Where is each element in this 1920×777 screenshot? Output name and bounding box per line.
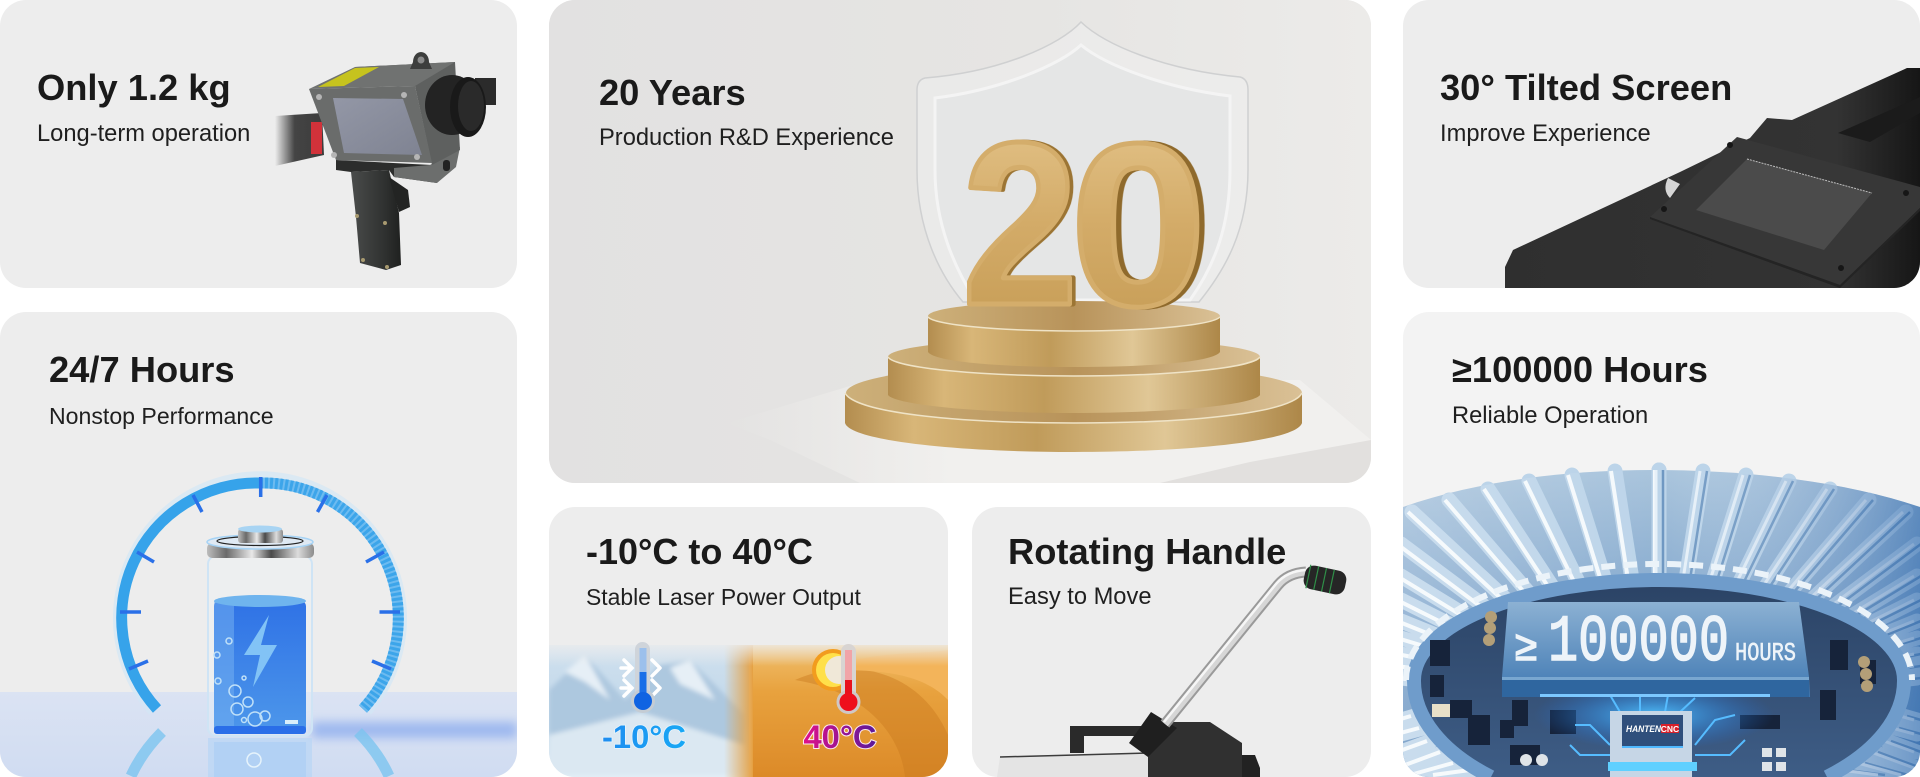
big golden number	[962, 94, 1207, 354]
text: subtitle: Nonstop Performance	[49, 403, 274, 429]
circuit board	[1406, 564, 1912, 777]
panel: rotating handle	[972, 507, 1371, 777]
panel: only 1.2 kg	[0, 0, 517, 288]
heading: Rotating Handle	[1008, 531, 1286, 572]
logo chip	[1608, 711, 1697, 777]
machine body	[997, 712, 1260, 777]
icon: snowflake	[621, 660, 660, 696]
handle tube	[1164, 570, 1306, 724]
heading: Only 1.2 kg	[37, 67, 231, 108]
handle grip	[1302, 564, 1348, 596]
text: subtitle: Production R&D Experience	[599, 125, 894, 151]
heading: -10°C to 40°C	[586, 531, 813, 572]
panel: 24/7 hours	[0, 312, 517, 777]
logo chip: HANTEN	[1626, 724, 1661, 734]
illustration: circuit board with heat sink	[1403, 462, 1920, 777]
illustration: snow and desert	[549, 642, 948, 777]
text: subtitle: Easy to Move	[1008, 584, 1152, 610]
logo chip: CNC	[1661, 724, 1679, 734]
panel: temperature range	[549, 507, 948, 777]
label: cold temperature: -10°C	[602, 719, 686, 755]
screen panel	[1650, 137, 1920, 288]
heading: ≥100000 Hours	[1452, 349, 1708, 390]
big golden number: 0	[1070, 95, 1207, 354]
radial fins	[1397, 470, 1920, 777]
heading: 30° Tilted Screen	[1440, 67, 1732, 108]
heading: 24/7 Hours	[49, 349, 235, 390]
text: subtitle: Long-term operation	[37, 121, 250, 147]
text: subtitle: Improve Experience	[1440, 121, 1651, 147]
illustration: machine with handle	[997, 564, 1346, 777]
illustration: golden 20 on podium	[549, 16, 1371, 483]
text: subtitle: Reliable Operation	[1452, 403, 1648, 429]
panel: tilted screen	[1403, 0, 1920, 288]
icon: cold thermometer	[631, 642, 655, 713]
label: hot temperature: 40°C	[804, 719, 876, 755]
display reading: HOURS	[1735, 638, 1796, 668]
gauge arc	[117, 475, 403, 776]
glass shield	[917, 22, 1248, 302]
platform	[727, 380, 1371, 483]
illustration: handheld laser gun	[276, 52, 496, 270]
heading: 20 Years	[599, 72, 746, 113]
icon: sun	[812, 649, 854, 691]
illustration: battery with gauge	[0, 471, 517, 777]
illustration: machine top with screen	[1505, 68, 1920, 288]
text: subtitle: Stable Laser Power Output	[586, 584, 861, 610]
battery	[207, 526, 314, 777]
big golden number: 2	[962, 94, 1078, 353]
display reading: ≥	[1514, 625, 1538, 673]
floor	[0, 692, 517, 777]
panel: 20 years	[549, 0, 1371, 483]
display block	[1502, 602, 1810, 697]
icon: hot thermometer	[836, 644, 860, 714]
desert scene	[724, 645, 948, 777]
podium	[845, 301, 1302, 452]
snow scene	[549, 645, 749, 777]
panel: 100000 hours	[1403, 312, 1920, 777]
display reading: 100000	[1548, 605, 1729, 680]
